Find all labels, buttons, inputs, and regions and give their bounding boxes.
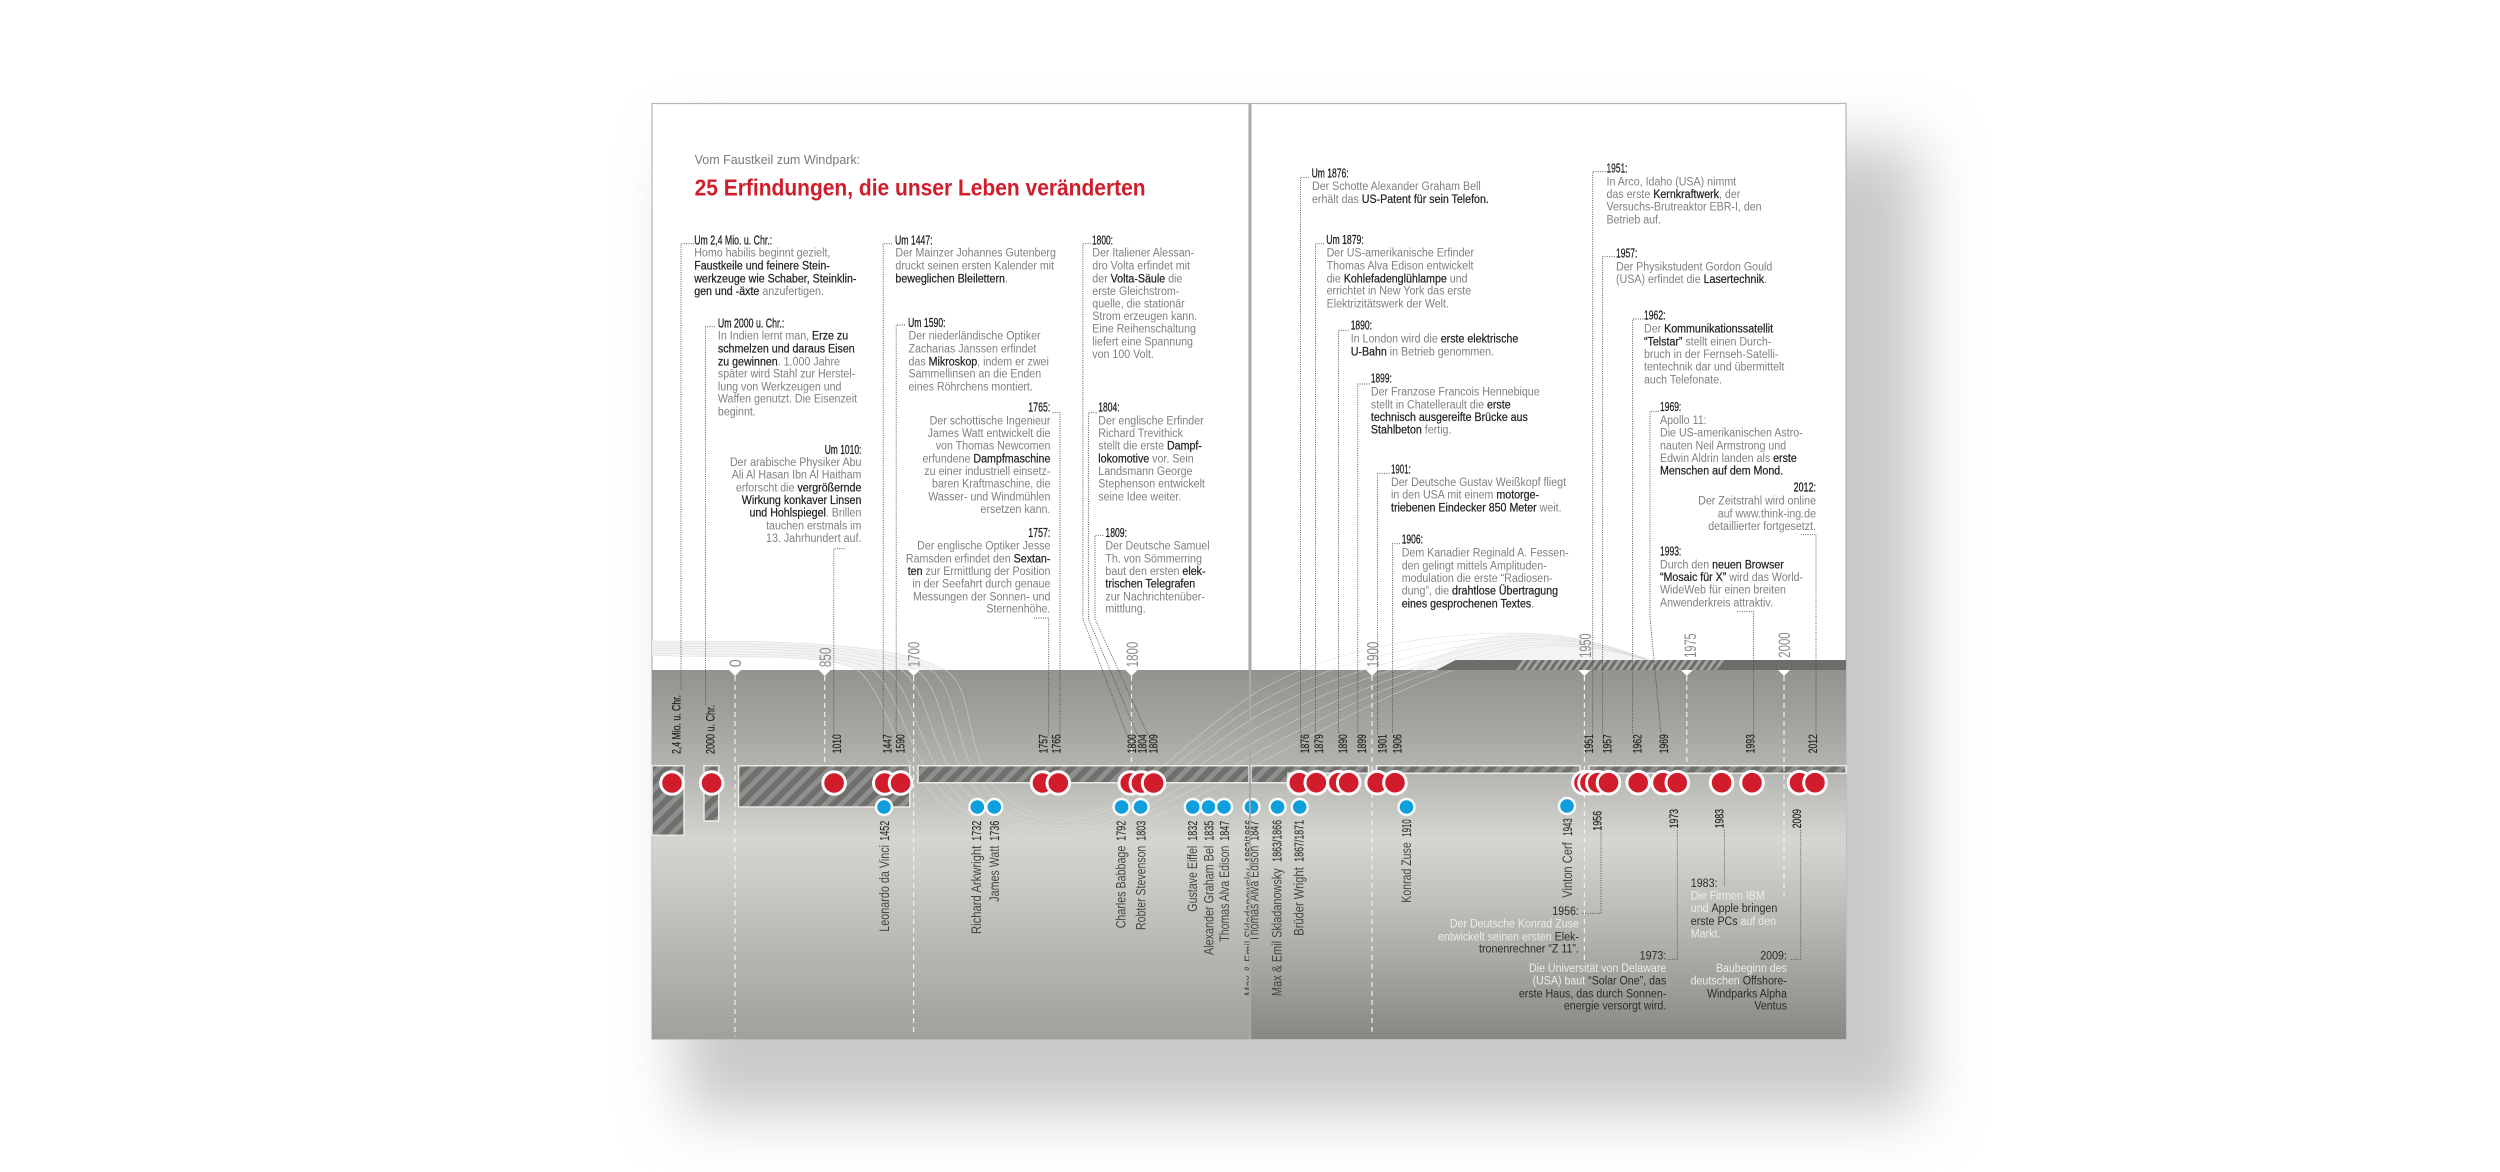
event: 1962: 1962:	[1644, 308, 1666, 323]
event: 1993: 1993:	[1660, 543, 1681, 558]
event: 1951: Betrieb auf.	[1606, 214, 1661, 226]
event: 1969: nauten Neil Armstrong und	[1660, 440, 1786, 452]
event: 1800: dro Volta erfindet mit	[1092, 260, 1191, 272]
event: 2000 v. Chr.	[718, 315, 858, 419]
event: 1757: Der englische Optiker Jesse	[917, 540, 1050, 553]
event: 1973: Die Universität von Delaware	[1529, 963, 1666, 975]
vertical year labels above the timeline: 2000 u. Chr.	[704, 705, 718, 754]
event: 1809: Th. von Sömmerring	[1105, 553, 1202, 565]
event: 1590: das Mikroskop, indem er zwei	[908, 356, 1049, 368]
blue inventor markers	[876, 798, 1575, 815]
event: 2012: 2012:	[1794, 480, 1816, 495]
event: 1901: 1901:	[1391, 462, 1411, 477]
vertical year labels above the timeline: 1757	[1036, 734, 1050, 753]
inventor names, vertical: Leonardo da Vinci	[876, 845, 892, 932]
inventor names, vertical: Charles Babbage	[1113, 846, 1129, 928]
event: 1951: In Arco, Idaho (USA) nimmt	[1606, 176, 1737, 188]
event: 1800: der Volta-Säule die	[1092, 273, 1182, 285]
event: 1757: Sternenhöhe.	[986, 603, 1050, 616]
event: 1800: 1800:	[1092, 232, 1113, 247]
vertical year labels above the timeline: 1899	[1355, 734, 1369, 753]
event: 1804: Landsmann George	[1098, 466, 1192, 478]
vertical year labels below the timeline	[1590, 809, 1804, 831]
vertical year labels above the timeline: 1957	[1600, 734, 1614, 753]
event: 1765: von Thomas Newcomen	[936, 440, 1050, 453]
event: 1901: triebenen Eindecker 850 Meter weit.	[1391, 502, 1562, 515]
event: 2000 v. Chr.: In Indien lernt man, Erze zu	[718, 330, 848, 343]
event: 1447: Der Mainzer Johannes Gutenberg	[895, 247, 1056, 260]
vertical year labels above the timeline: 1951	[1582, 734, 1596, 753]
inventor names, vertical: 1835	[1202, 821, 1216, 841]
event: 1010: und Hohlspiegel. Brillen	[749, 507, 861, 520]
inventor names, vertical: Max & Emil Skladanowsky	[1241, 868, 1257, 996]
axis year labels: 2000	[1775, 632, 1794, 658]
inventor names, vertical: Alexander Graham Bel	[1200, 846, 1216, 955]
vertical year labels above the timeline: 1876	[1298, 734, 1312, 753]
event: 2,4 Mio. v. Chr.	[693, 232, 857, 298]
event: 1809: baut den ersten elek-	[1105, 566, 1206, 578]
event: 1906: 1906:	[1402, 532, 1423, 547]
vertical year labels above the timeline: 2012	[1806, 734, 1820, 753]
event: 1765: ersetzen kann.	[981, 504, 1050, 516]
event: 2009: Baubeginn des	[1716, 963, 1787, 975]
event: 1983: und Apple bringen	[1691, 903, 1777, 915]
event: 2009	[1691, 950, 1788, 1013]
event: 2,4 Mio. v. Chr.: Homo habilis beginnt gezielt,	[694, 247, 830, 260]
event: 1879: Thomas Alva Edison entwickelt	[1327, 260, 1474, 272]
event: 1809: Der Deutsche Samuel	[1105, 540, 1210, 553]
inventor names, vertical: 1910	[1400, 819, 1414, 837]
axis markers with dashed era lines	[729, 670, 1790, 1037]
event: 1809: mittlung.	[1105, 603, 1146, 616]
event: 1901: Der Deutsche Gustav Weißkopf fliegt	[1391, 477, 1567, 489]
axis year labels: 1975	[1681, 633, 1700, 658]
inventor names, vertical: James Watt	[986, 846, 1002, 902]
event: 1969: Edwin Aldrin landen als erste	[1660, 453, 1797, 465]
event: 1993: Durch den neuen Browser	[1660, 559, 1784, 571]
event: 1962: bruch in der Fernseh-Satelli-	[1644, 349, 1779, 361]
event: 1765: erfundene Dampfmaschine	[922, 453, 1050, 465]
event: 1983: Die Firmen IBM	[1691, 890, 1765, 902]
event: 1957	[1616, 246, 1772, 286]
inventor names, vertical: Richard Arkwright	[968, 846, 984, 934]
hatched era bars	[652, 766, 1846, 835]
event: 1906	[1402, 532, 1569, 610]
event: 1879: Um 1879:	[1326, 232, 1364, 247]
inventor names, vertical: 1847	[1218, 821, 1232, 841]
event: 1951: 1951:	[1606, 160, 1628, 175]
event: 1590	[908, 315, 1049, 393]
event: 1983: erste PCs auf den	[1691, 916, 1776, 928]
event: 2,4 Mio. v. Chr.: Faustkeile und feinere Stein-	[694, 260, 830, 272]
event: 1010: Ali Al Hasan Ibn Al Haitham	[732, 469, 861, 482]
event: 1969: 1969:	[1660, 399, 1681, 414]
vertical year labels above the timeline: 1962	[1631, 734, 1645, 753]
axis year labels: 0	[726, 659, 745, 667]
vertical year labels below the timeline: 1983	[1712, 809, 1726, 828]
event: 2000 v. Chr.: beginnt.	[718, 406, 756, 419]
vertical year labels above the timeline: 1890	[1336, 734, 1350, 753]
event: 1906: eines gesprochenen Textes.	[1402, 598, 1534, 610]
inventor names, vertical: Konrad Zuse	[1398, 842, 1414, 903]
event: 1906: dung”, die drahtlose Übertragung	[1402, 585, 1558, 598]
event: 1765: zu einer industriell einsetz-	[924, 466, 1051, 478]
event: 1757	[906, 525, 1051, 616]
event: 1951: Versuchs-Brutreaktor EBR-I, den	[1606, 201, 1762, 214]
event: 1890	[1351, 318, 1518, 358]
vertical year labels below the timeline: 1956	[1590, 811, 1604, 831]
event: 1800: von 100 Volt.	[1092, 349, 1154, 361]
event: 1993: Anwenderkreis attraktiv.	[1660, 597, 1773, 609]
event: 1973: (USA) baut “Solar One”, das	[1532, 975, 1667, 988]
event: 1957: Der Physikstudent Gordon Gould	[1616, 261, 1772, 273]
event: 1757: Ramsden erfindet den Sextan-	[906, 553, 1051, 565]
inventor names, vertical: 1803	[1134, 821, 1148, 841]
axis year labels	[726, 632, 1794, 667]
event: 1804: lokomotive vor. Sein	[1098, 453, 1194, 465]
event: 1879: die Kohlefadenglühlampe und	[1327, 273, 1468, 285]
event: 1969: Apollo 11:	[1660, 415, 1707, 427]
axis year labels: 1900	[1364, 642, 1382, 667]
event: 1906: den gelingt mittels Amplituden-	[1402, 560, 1547, 572]
event: 1951	[1606, 160, 1762, 226]
event: 1973: energie versorgt wird.	[1564, 1000, 1666, 1013]
event: 1800: quelle, die stationär	[1092, 298, 1185, 310]
inventor names, vertical: 1863/1866	[1243, 820, 1257, 862]
event: 1890: In London wird die erste elektrische	[1351, 333, 1518, 345]
event: 2009: deutschen Offshore-	[1691, 975, 1787, 988]
vertical year labels above the timeline: 1765	[1050, 734, 1064, 753]
event: 1993: WideWeb für einen breiten	[1660, 584, 1786, 597]
red invention markers	[661, 771, 1826, 794]
event: 1010	[730, 442, 861, 545]
event: 1899: Stahlbeton fertig.	[1371, 424, 1451, 437]
event: 1447	[895, 232, 1056, 285]
event: 1906: modulation die erste “Radiosen-	[1402, 573, 1553, 585]
event: 1879: Der US-amerikanische Erfinder	[1327, 247, 1474, 260]
event: 1804: Stephenson entwickelt	[1098, 478, 1206, 491]
event: 1956: Der Deutsche Konrad Zuse	[1450, 918, 1579, 930]
event: 1993: “Mosaic für X” wird das World-	[1660, 572, 1803, 584]
event: 1804: seine Idee weiter.	[1098, 491, 1181, 503]
inventor names, vertical: 1867/1871	[1292, 820, 1306, 862]
inventor names, vertical: Vinton Cerf	[1559, 842, 1575, 898]
event: 2000 v. Chr.: Waffen genutzt. Die Eisenzeit	[718, 393, 858, 406]
event: 1800: Der Italiener Alessan-	[1092, 247, 1194, 260]
event: 2000 v. Chr.: später wird Stahl zur Herstel-	[718, 368, 856, 381]
event: 1757: Messungen der Sonnen- und	[913, 591, 1050, 603]
event: 1447: druckt seinen ersten Kalender mit	[895, 260, 1055, 272]
event: 2,4 Mio. v. Chr.: gen und -äxte anzufertigen.	[694, 286, 824, 298]
event: 1765: James Watt entwickelt die	[928, 428, 1050, 440]
event: 1983: 1983:	[1691, 878, 1717, 890]
event: 1956: entwickelt seinen ersten Elek-	[1438, 931, 1579, 943]
inventor names, vertical: 1736	[988, 821, 1002, 841]
dark band at top right of the timeline	[1436, 660, 1846, 670]
event: 1906: Dem Kanadier Reginald A. Fessen-	[1402, 547, 1569, 559]
event: 2012: auf www.think-ing.de	[1718, 508, 1816, 520]
inventor names, vertical: 1452	[878, 821, 892, 841]
event: 1962	[1644, 308, 1785, 386]
vertical year labels below the timeline: 2009	[1790, 809, 1804, 828]
vertical year labels above the timeline: 1800	[1125, 734, 1139, 753]
axis year labels: 850	[816, 648, 835, 667]
vertical year labels above the timeline: 1993	[1743, 734, 1757, 753]
event: 1969: Die US-amerikanischen Astro-	[1660, 427, 1803, 440]
inventor names, vertical: 1943	[1561, 818, 1575, 836]
event: 1800: erste Gleichstrom-	[1092, 286, 1180, 298]
vertical year labels above the timeline: 1010	[830, 734, 844, 753]
event: 1804	[1098, 400, 1206, 503]
event: 1765: Der schottische Ingenieur	[930, 415, 1051, 427]
inventor names, vertical: 1847	[1247, 821, 1261, 841]
vertical year labels above the timeline: 1809	[1146, 734, 1160, 753]
event: 1899: stellt in Chatellerault die erste	[1371, 399, 1511, 411]
subtitle: Vom Faustkeil zum Windpark:	[695, 152, 860, 167]
vertical year labels above the timeline: 1590	[894, 734, 908, 753]
event: 1901: in den USA mit einem motorge-	[1391, 489, 1539, 502]
event: 1804: Richard Trevithick	[1098, 428, 1183, 440]
event: 1447: Um 1447:	[895, 232, 933, 247]
drop shadow behind the brochure	[682, 145, 1920, 1113]
event: 2,4 Mio. v. Chr.: Um 2,4 Mio. u. Chr.:	[694, 232, 772, 247]
event: 2,4 Mio. v. Chr.: werkzeuge wie Schaber, Steinklin-	[693, 273, 857, 285]
event: 1876: Um 1876:	[1312, 165, 1349, 180]
vertical year labels above the timeline: 1906	[1391, 734, 1405, 753]
inventor names, vertical: 1863/1866	[1270, 820, 1284, 862]
vertical year labels above the timeline: 1969	[1657, 734, 1671, 753]
event: 1800: Eine Reihenschaltung	[1092, 323, 1196, 336]
axis year labels: 1950	[1576, 633, 1595, 658]
vertical year labels below the timeline: 1973	[1667, 809, 1681, 828]
event: 1899: 1899:	[1371, 371, 1392, 386]
event: 1800	[1092, 232, 1197, 361]
event: 1765: 1765:	[1028, 400, 1050, 415]
event: 1590: Sammellinsen an die Enden	[908, 368, 1041, 381]
vertical year labels above the timeline: 1447	[880, 734, 894, 753]
event: 1800: Strom erzeugen kann.	[1092, 311, 1197, 323]
event: 1957: 1957:	[1616, 246, 1637, 261]
event: 1962: Der Kommunikationssatellit	[1644, 323, 1774, 336]
event: 1890: 1890:	[1351, 318, 1372, 333]
event: 1962: auch Telefonate.	[1644, 374, 1722, 386]
event: 2009: 2009:	[1760, 950, 1787, 962]
event: 1765	[922, 400, 1051, 516]
event: 1590: eines Röhrchens montiert.	[908, 381, 1033, 393]
event: 1969: Menschen auf dem Mond.	[1660, 465, 1783, 478]
event: 1010: erforscht die vergrößernde	[736, 482, 861, 494]
event: 1010: Wirkung konkaver Linsen	[742, 495, 861, 507]
event: 1876: Der Schotte Alexander Graham Bell	[1312, 181, 1481, 193]
event: 1765: baren Kraftmaschine, die	[932, 478, 1050, 491]
vertical year labels above the timeline: 2,4 Mio. u. Chr.	[670, 695, 684, 754]
inventor names, vertical: Gustave Eiffel	[1184, 846, 1200, 912]
event: 2012: Der Zeitstrahl wird online	[1698, 495, 1816, 508]
event: 1879: Elektrizitätswerk der Welt.	[1327, 298, 1449, 310]
event: 1957: (USA) erfindet die Lasertechnik.	[1616, 274, 1767, 286]
event: 1993	[1660, 543, 1803, 609]
axis year labels: 1800	[1123, 642, 1142, 667]
event: 1876	[1312, 165, 1489, 206]
inventor names, vertical: Robter Stevenson	[1132, 846, 1148, 930]
event: 1899: Der Franzose Francois Hennebique	[1371, 386, 1540, 399]
event: 1809: zur Nachrichtenüber-	[1105, 591, 1205, 603]
event: 1804: stellt die erste Dampf-	[1098, 440, 1202, 453]
event: 1447: beweglichen Bleilettern.	[895, 273, 1008, 285]
event: 2009: Ventus	[1754, 1000, 1787, 1013]
inventor names, vertical: 1792	[1115, 821, 1129, 841]
event: 1956	[1438, 906, 1579, 956]
event: 1983: Markt.	[1691, 928, 1720, 940]
event: 1765: Wasser- und Windmühlen	[928, 491, 1050, 503]
event: 1983	[1691, 878, 1777, 940]
event: 2000 v. Chr.: Um 2000 u. Chr.:	[718, 315, 784, 330]
event: 1809: 1809:	[1105, 525, 1127, 540]
event: 1951: das erste Kernkraftwerk, der	[1606, 189, 1741, 201]
event: 2012: detaillierter fortgesetzt.	[1708, 521, 1816, 533]
event: 1956: 1956:	[1552, 906, 1579, 918]
vertical year labels above the timeline: 1804	[1135, 734, 1149, 753]
event: 1804: 1804:	[1098, 400, 1120, 415]
event: 1757: ten zur Ermittlung der Position	[908, 566, 1050, 578]
event: 1590: Zacharias Janssen erfindet	[908, 343, 1037, 355]
event: 1809	[1105, 525, 1210, 616]
event: 2000 v. Chr.: schmelzen und daraus Eisen	[718, 343, 855, 355]
inventor names, vertical: 1732	[970, 821, 984, 841]
title: 25 Erfindungen, die unser Leben veränderten	[695, 174, 1146, 200]
event: 1901	[1391, 462, 1567, 515]
vertical year labels above the timeline	[670, 695, 1820, 754]
event: 1962: tentechnik dar und übermittelt	[1644, 361, 1785, 373]
event: 1973: erste Haus, das durch Sonnen-	[1519, 988, 1667, 1000]
inventor names, vertical: Thomas Alva Edison	[1245, 846, 1261, 942]
event: 1809: trischen Telegrafen	[1105, 578, 1195, 591]
event: 1757: 1757:	[1028, 525, 1050, 540]
vertical year labels above the timeline: 1901	[1376, 734, 1390, 753]
axis year labels: 1700	[905, 642, 924, 667]
event: 2000 v. Chr.: zu gewinnen. 1.000 Jahre	[718, 356, 840, 368]
dotted leader lines from events to timeline	[681, 172, 1816, 959]
vertical year labels above the timeline: 1879	[1312, 734, 1326, 753]
inventor names, vertical: Brüder Wright	[1290, 867, 1306, 936]
event: 1973	[1519, 950, 1667, 1013]
event: 1899: technisch ausgereifte Brücke aus	[1371, 412, 1528, 424]
inventor names, vertical	[876, 818, 1575, 996]
event: 1973: 1973:	[1640, 950, 1666, 962]
event: 1010: Der arabische Physiker Abu	[730, 457, 861, 469]
panel: brochure background pages	[652, 104, 1846, 1039]
event: 1899	[1371, 371, 1540, 437]
event: 1879: errichtet in New York das erste	[1327, 285, 1471, 298]
event: 1969	[1660, 399, 1803, 478]
event: 1879	[1326, 232, 1474, 310]
page fold between the two pages	[1249, 104, 1251, 1039]
event: 1956: tronenrechner “Z 11”.	[1479, 943, 1579, 956]
event: 1590: Der niederländische Optiker	[908, 330, 1041, 343]
event: 1804: Der englische Erfinder	[1098, 415, 1204, 427]
event: 1010: 13. Jahrhundert auf.	[766, 533, 861, 545]
inventor names, vertical: Max & Emil Skladanowsky	[1268, 868, 1284, 996]
event: 1010: Um 1010:	[825, 442, 861, 457]
event: 1962: “Telstar” stellt einen Durch-	[1644, 336, 1772, 348]
event: 1010: tauchen erstmals im	[766, 520, 861, 532]
event: 2000 v. Chr.: lung von Werkzeugen und	[718, 381, 841, 393]
event: 1800: liefert eine Spannung	[1092, 336, 1193, 348]
event: 1590: Um 1590:	[908, 315, 946, 330]
event: 1757: in der Seefahrt durch genaue	[912, 578, 1050, 591]
inventor names, vertical: 1832	[1186, 821, 1200, 841]
event: 2009: Windparks Alpha	[1707, 988, 1788, 1000]
wave line bundle crossing both pages	[652, 633, 1655, 839]
event: 1890: U-Bahn in Betrieb genommen.	[1351, 346, 1494, 358]
event: 2012	[1698, 480, 1816, 533]
inventor names, vertical: Thomas Alva Edison	[1216, 846, 1232, 942]
event: 1876: erhält das US-Patent für sein Telefon.	[1312, 194, 1489, 206]
